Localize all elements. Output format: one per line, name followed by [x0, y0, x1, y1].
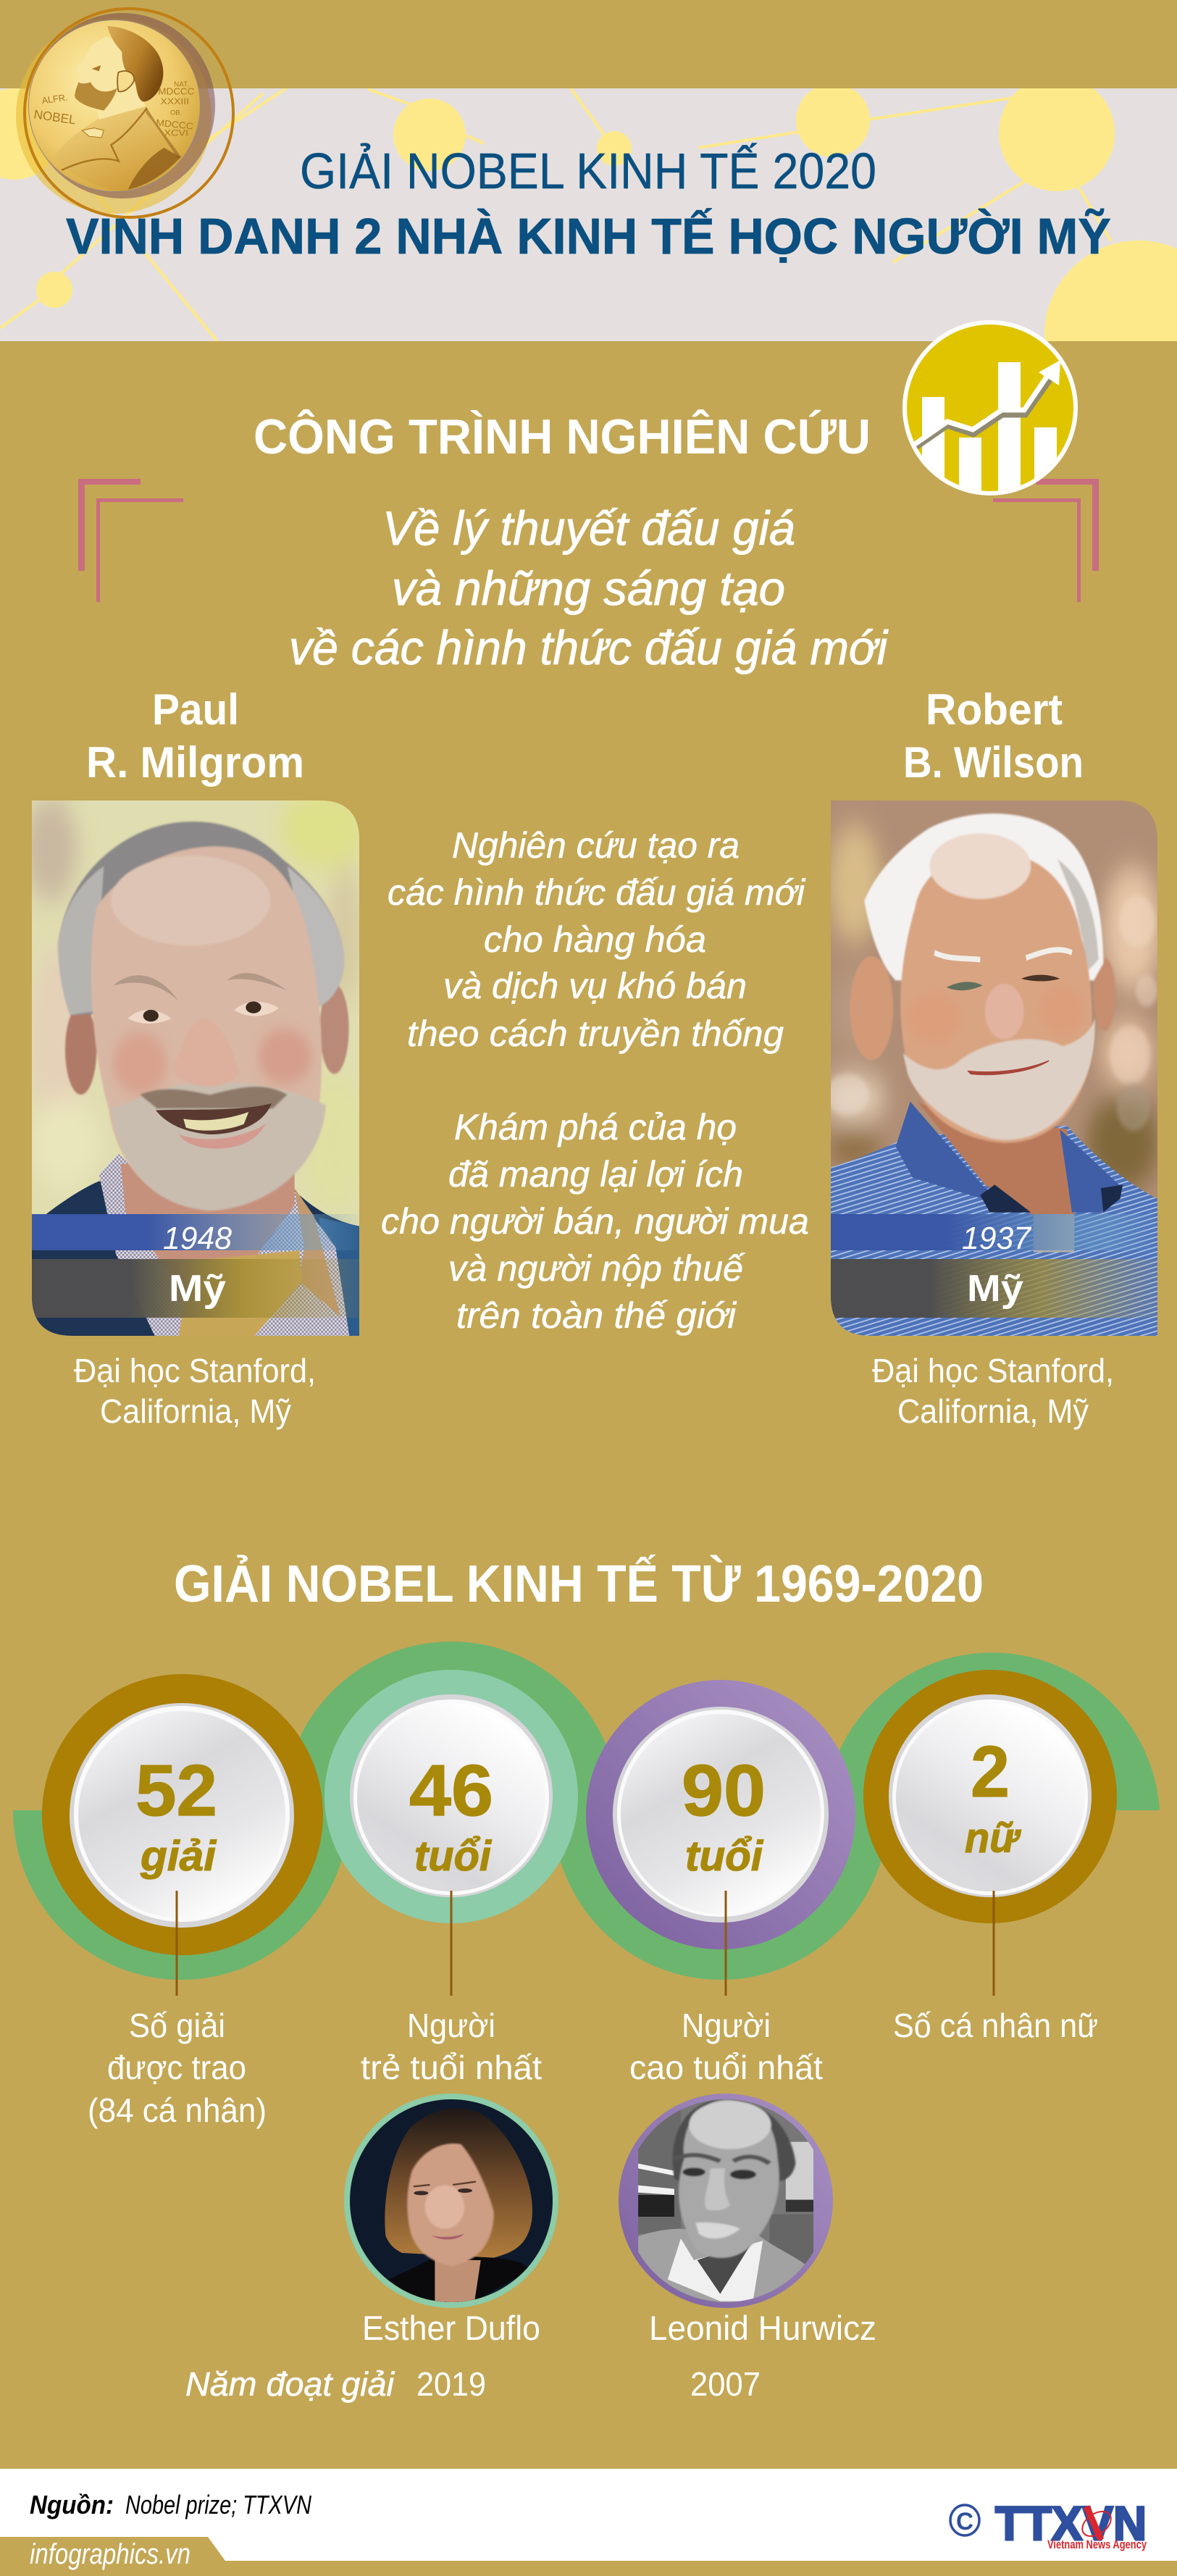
label: award year row: 2007 [690, 2365, 761, 2403]
website: infographics.vn [30, 2538, 190, 2570]
label: oldest: cao tuổi nhất [629, 2049, 823, 2086]
name: Robert B. Wilson: Robert [926, 685, 1063, 734]
year band [831, 1214, 1157, 1250]
text: research description: và dịch vụ khó bán [443, 966, 747, 1006]
label: prizes awarded: được trao [107, 2049, 246, 2086]
icon: Nobel medal: ALFR. [41, 92, 68, 106]
name: Paul R. Milgrom: Paul [152, 685, 239, 734]
icon: Nobel medal: NAT. [174, 80, 189, 88]
label: Milgrom year and country: 1948 [163, 1221, 233, 1256]
text: research description: các hình thức đấu giá mới [388, 872, 806, 913]
label: Wilson year and country [962, 1221, 1031, 1310]
stat: 46 years old [324, 1670, 578, 1923]
stat: 90 years old [586, 1680, 855, 1949]
ear [117, 71, 134, 91]
label: oldest [629, 2007, 823, 2086]
logo: TTXVN: TTXVN [995, 2496, 1147, 2550]
research topic text [289, 501, 889, 674]
name: Paul R. Milgrom [86, 685, 304, 787]
stat: 90 years old: tuổi [685, 1833, 764, 1880]
label: Wilson year and country: Mỹ [967, 1268, 1023, 1310]
text: Wilson university: California, Mỹ [897, 1392, 1089, 1430]
research topic text: và những sáng tạo [392, 561, 785, 615]
green wave behind rings [13, 1642, 1160, 1980]
text: research description: Nghiên cứu tạo ra [452, 825, 740, 866]
leader lines [177, 1891, 994, 1996]
text: research description: cho hàng hóa [484, 919, 706, 960]
icon: bracket right [993, 479, 1099, 602]
label: prizes awarded: Số giải [129, 2007, 225, 2044]
text: Milgrom university: California, Mỹ [100, 1392, 291, 1430]
country band [831, 1259, 1157, 1318]
stat: 2 women: 2 [971, 1731, 1010, 1812]
label: women laureates: Số cá nhân nữ [893, 2007, 1098, 2044]
label: award year row: Năm đoạt giải [185, 2365, 395, 2403]
heading: research work: CÔNG TRÌNH NGHIÊN CỨU [254, 409, 871, 464]
text: research description: và người nộp thuế [448, 1248, 745, 1289]
name: Paul R. Milgrom: R. Milgrom [86, 738, 304, 787]
text: research description: đã mang lại lợi ích [448, 1154, 743, 1195]
text: Milgrom university: Đại học Stanford, [74, 1352, 316, 1389]
label: youngest: Người [407, 2007, 495, 2044]
research topic text: Về lý thuyết đấu giá [382, 501, 795, 555]
hair [107, 26, 163, 101]
label: Wilson year and country: 1937 [962, 1221, 1031, 1256]
source: Nguồn: [30, 2490, 114, 2519]
country band [32, 1259, 359, 1318]
beard [75, 82, 117, 111]
stat: 2 women: nữ [965, 1815, 1021, 1862]
logo: TTXVN: Vietnam News Agency [1047, 2538, 1147, 2551]
label: prizes awarded [88, 2007, 267, 2129]
label: oldest: Người [682, 2007, 771, 2044]
photo: Robert Wilson [824, 800, 1164, 1340]
stat: 52 prizes [42, 1674, 323, 1955]
label: Milgrom year and country [163, 1221, 233, 1310]
logo: TTXVN: C [956, 2508, 973, 2535]
icon: Nobel medal: NOBEL [33, 106, 77, 127]
text: research description: Khám phá của họ [454, 1107, 737, 1147]
portrait: Esther Duflo [344, 2094, 558, 2308]
text: research description [381, 825, 809, 1336]
stat: 2 women [863, 1670, 1117, 1923]
icon: Nobel medal: MDCCC [158, 87, 194, 97]
icon: growth chart [902, 320, 1078, 503]
name: Robert B. Wilson [903, 685, 1084, 787]
text: research description: theo cách truyền thống [407, 1013, 784, 1054]
label: Leonid Hurwicz: Leonid Hurwicz [649, 2309, 876, 2347]
coat [59, 106, 174, 191]
icon: Nobel medal [16, 9, 233, 217]
name: Robert B. Wilson: B. Wilson [903, 738, 1084, 787]
heading: Nobel economics 1969-2020: GIẢI NOBEL KINH TẾ TỪ 1969-2020 [174, 1555, 984, 1613]
header band with network pattern [0, 88, 1177, 341]
stat: 90 years old: 90 [682, 1750, 766, 1831]
face and neck [75, 36, 146, 120]
stat: 52 prizes: giải [140, 1833, 217, 1880]
icon: Nobel medal: XXXIII [161, 96, 189, 106]
label: prizes awarded: (84 cá nhân) [88, 2091, 267, 2129]
research topic text: về các hình thức đấu giá mới [289, 621, 889, 674]
shoulder shadow [128, 148, 181, 190]
label: Esther Duflo: Esther Duflo [362, 2309, 540, 2347]
source [30, 2490, 312, 2519]
portrait: Leonid Hurwicz [619, 2094, 837, 2311]
stat: 52 prizes: 52 [135, 1750, 217, 1831]
text: Wilson university [872, 1352, 1114, 1430]
lapels and tie [62, 108, 147, 170]
label: Milgrom year and country: Mỹ [169, 1268, 226, 1310]
icon: Nobel medal: OB. [170, 109, 182, 117]
year band [32, 1214, 359, 1250]
text: research description: cho người bán, người mua [381, 1201, 809, 1242]
label: award year row: 2019 [416, 2365, 486, 2403]
title: VINH DANH 2 NHÀ KINH TẾ HỌC NGƯỜI MỸ [66, 208, 1111, 264]
icon: bracket left [78, 479, 183, 602]
title: GIẢI NOBEL KINH TẾ 2020 [300, 143, 876, 199]
stat: 46 years old: tuổi [414, 1833, 493, 1880]
text: research description: trên toàn thế giới [456, 1295, 737, 1336]
eye shadow [92, 65, 101, 71]
source: Nobel prize; TTXVN [125, 2490, 312, 2519]
text: Milgrom university [74, 1352, 316, 1430]
title [66, 143, 1111, 264]
label: youngest: trẻ tuổi nhất [361, 2049, 542, 2086]
icon: Nobel medal: XCVI [164, 127, 188, 138]
label: youngest [361, 2007, 542, 2086]
footer [0, 2469, 1177, 2576]
label: award year row [185, 2365, 761, 2403]
text: Wilson university: Đại học Stanford, [872, 1352, 1114, 1389]
stat: 46 years old: 46 [409, 1750, 493, 1831]
photo: Paul Milgrom [24, 787, 367, 1340]
icon: Nobel medal: MDCCC [156, 117, 194, 132]
